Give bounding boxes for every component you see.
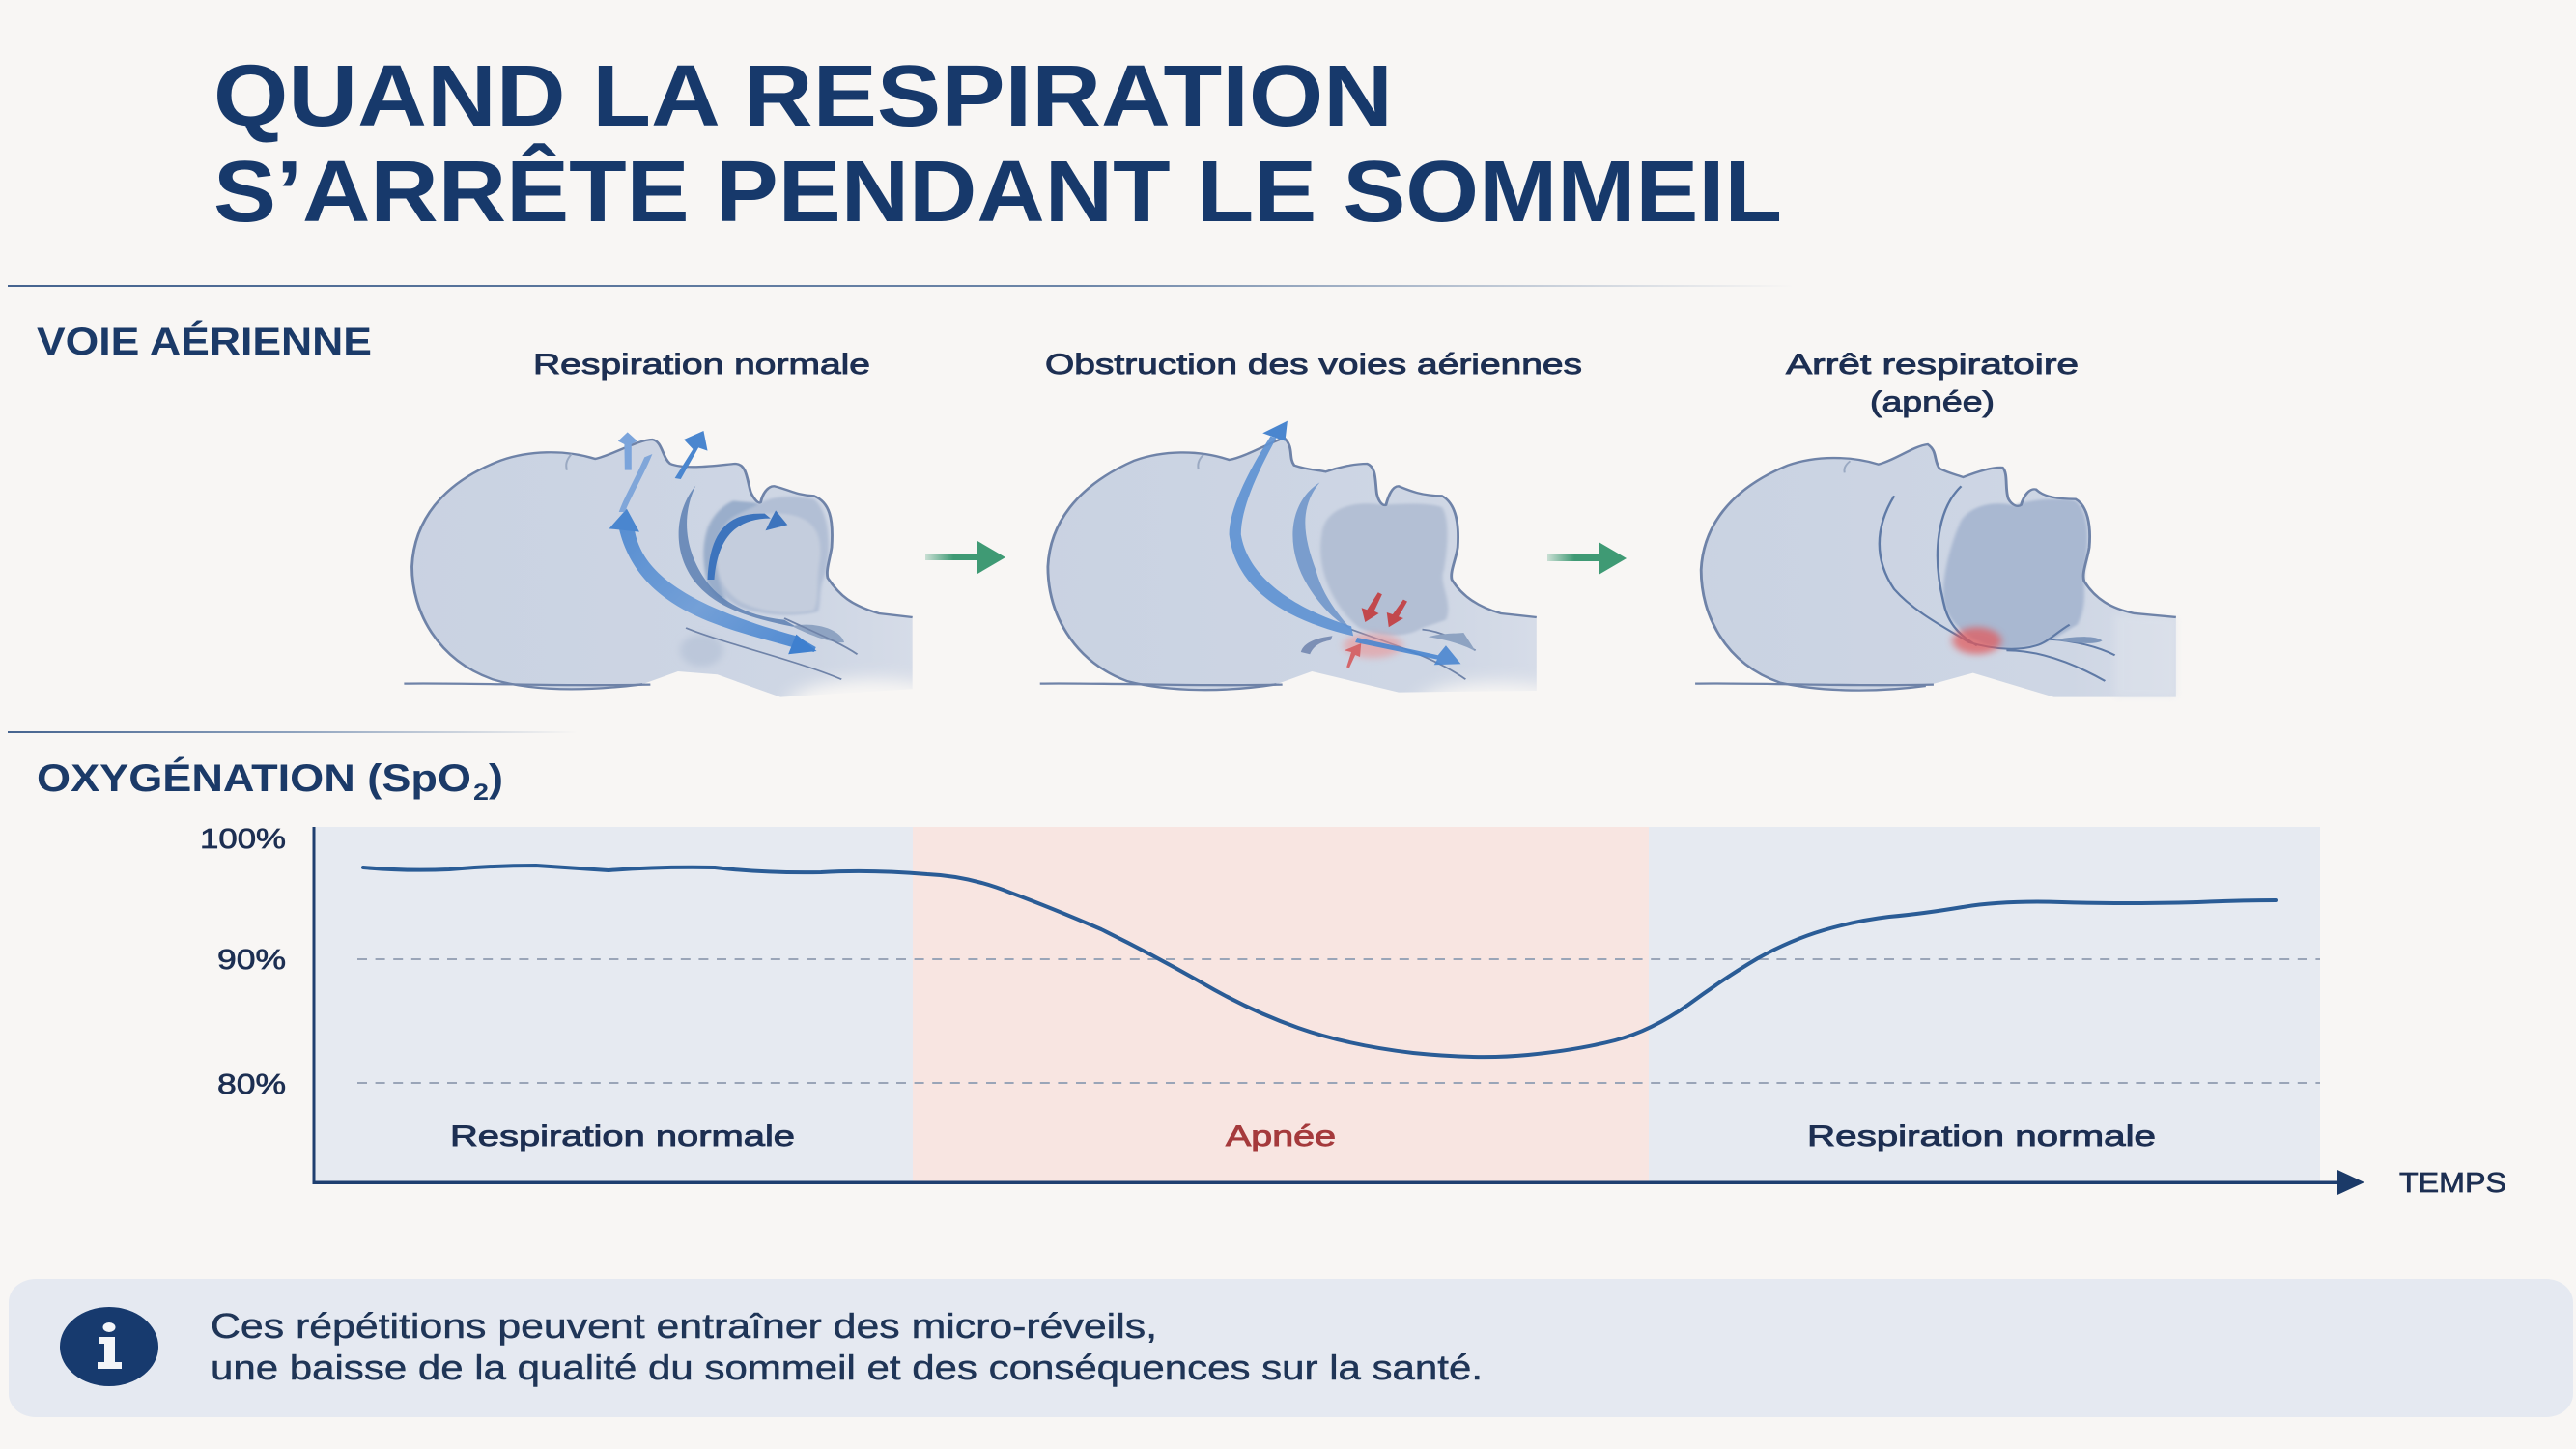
bottom fade — [788, 679, 954, 727]
nose stream 1 — [619, 454, 652, 512]
SpO2 curve — [363, 866, 2276, 1057]
head outline — [1048, 438, 1537, 690]
soft palate — [792, 625, 844, 642]
band: apnea — [913, 827, 1649, 1182]
small exhale arrow 2 — [675, 431, 708, 479]
compression arrow 3 — [1345, 643, 1361, 668]
section heading: oxygénation: OXYGÉNATION (SpO — [37, 756, 471, 800]
callout panel — [9, 1279, 2573, 1417]
illustration: head, normal breathing — [404, 431, 954, 727]
oral airflow arrow — [708, 514, 771, 580]
throat lines — [686, 618, 858, 679]
section heading: oxygénation: ) — [489, 757, 503, 800]
palate crescent — [704, 500, 759, 606]
title: S’ARRÊTE PENDANT LE SOMMEIL — [213, 142, 1782, 241]
pillow line — [1040, 683, 1283, 685]
forehead crease — [566, 454, 572, 470]
mouth and tongue — [1943, 499, 2087, 649]
axis label temps: TEMPS — [2399, 1168, 2506, 1199]
forehead crease — [1198, 455, 1203, 469]
section heading: oxygénation: 2 — [473, 780, 489, 806]
band label normal left: Respiration normale — [450, 1121, 795, 1152]
forehead crease — [1844, 461, 1850, 472]
label: respiration normale: Respiration normale — [533, 349, 870, 381]
time axis — [313, 1180, 2341, 1184]
pillow line — [1695, 683, 1934, 685]
tick label 80: 80% — [217, 1069, 286, 1100]
chart: SpO2 over time — [200, 824, 2506, 1199]
soft palate — [1429, 633, 1476, 651]
tongue — [717, 513, 820, 612]
illustration: head, obstruction — [1040, 421, 1576, 724]
neck shading — [680, 635, 723, 667]
band label normal right: Respiration normale — [1807, 1121, 2156, 1152]
head fill — [412, 440, 913, 697]
band: normal left — [314, 827, 913, 1182]
soft palate — [2053, 637, 2103, 643]
bottom fade — [1418, 683, 1576, 724]
head outline — [412, 440, 913, 689]
label: arrêt respiratoire: Arrêt respiratoire — [1786, 349, 2079, 381]
compression arrow 1 — [1362, 592, 1382, 622]
callout — [9, 1279, 2573, 1417]
tick label 90: 90% — [217, 945, 286, 976]
illustration: head, apnea — [1695, 444, 2176, 697]
obstruction glow — [1953, 627, 2001, 654]
band: normal right — [1649, 827, 2320, 1182]
mouth cavity — [704, 497, 829, 615]
title — [213, 48, 1782, 241]
arrowhead down — [788, 635, 817, 654]
band label apnea: Apnée — [1226, 1121, 1336, 1152]
label: arrêt respiratoire: (apnée) — [1870, 386, 1995, 418]
weak airflow out — [1355, 638, 1460, 665]
obstruction glow — [1344, 634, 1402, 658]
callout text: Ces répétitions peuvent entraîner des micro-réveils, — [211, 1306, 1157, 1346]
arrowhead up — [1262, 421, 1288, 441]
head outline — [1701, 444, 2176, 691]
airflow arrow blocked — [1230, 437, 1353, 636]
label: arrêt respiratoire — [1786, 349, 2079, 418]
callout text: une baisse de la qualité du sommeil et des conséquences sur la santé. — [211, 1348, 1483, 1387]
title: QUAND LA RESPIRATION — [213, 48, 1393, 145]
callout text — [211, 1306, 1483, 1387]
small dark flow — [1301, 636, 1332, 654]
arrowhead up — [609, 509, 639, 532]
icon: info — [60, 1307, 158, 1386]
tick label 100: 100% — [200, 824, 286, 855]
throat lines — [1351, 630, 1476, 679]
y axis — [313, 827, 315, 1184]
airway dark band — [679, 486, 798, 628]
pillow line — [404, 683, 650, 685]
head fill — [1701, 444, 2176, 697]
main airflow arrow — [619, 528, 816, 652]
head fill — [1048, 438, 1537, 693]
small exhale arrow 1 — [618, 432, 637, 470]
arrow: obstruction to apnea — [1547, 542, 1627, 575]
section heading: voie aérienne: VOIE AÉRIENNE — [37, 320, 372, 363]
neck fade — [2115, 615, 2176, 697]
compression arrow 2 — [1387, 600, 1407, 627]
arrow: normal to obstruction — [925, 541, 1005, 574]
mouth and tongue — [1320, 503, 1448, 635]
airway dark band — [1292, 482, 1351, 630]
label: obstruction: Obstruction des voies aériennes — [1045, 349, 1582, 381]
axis arrowhead — [2337, 1170, 2364, 1195]
airway lines — [1880, 486, 2115, 681]
